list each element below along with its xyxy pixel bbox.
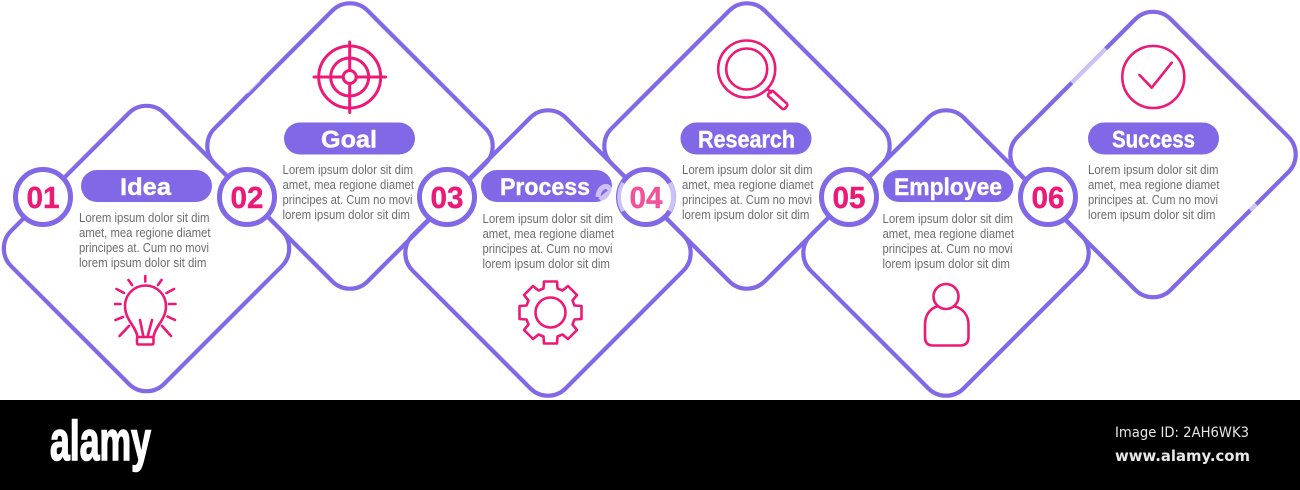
text block: amet, mea regione diamet bbox=[482, 226, 614, 241]
text block: amet, mea regione diamet bbox=[682, 177, 814, 192]
text block: lorem ipsum dolor sit dim bbox=[482, 256, 610, 271]
text block: principes at. Cum no movi bbox=[282, 192, 413, 207]
diamond outline 04 bbox=[594, 0, 900, 299]
text block bbox=[1088, 162, 1220, 222]
text block: principes at. Cum no movi bbox=[882, 241, 1013, 256]
number badge 05 bbox=[822, 170, 876, 224]
number badge 01 bbox=[16, 170, 70, 224]
diamond outline 02 bbox=[197, 0, 503, 299]
text block bbox=[79, 210, 211, 270]
text block bbox=[882, 211, 1014, 271]
website address: www.alamy.com bbox=[1115, 447, 1250, 465]
text block: principes at. Cum no movi bbox=[482, 241, 613, 256]
diamond outline 01 bbox=[0, 95, 300, 402]
text block: Lorem ipsum dolor sit dim bbox=[79, 210, 210, 225]
number badge 01: 01 bbox=[26, 180, 60, 215]
text block: principes at. Cum no movi bbox=[1088, 192, 1218, 207]
text block: amet, mea regione diamet bbox=[282, 177, 414, 192]
icon: magnifying glass bbox=[718, 40, 788, 110]
text block: lorem ipsum dolor sit dim bbox=[882, 256, 1010, 271]
number badge 04: 04 bbox=[630, 180, 663, 215]
diamond outline 03 bbox=[395, 100, 701, 406]
text block: lorem ipsum dolor sit dim bbox=[79, 255, 206, 270]
heading: Idea bbox=[81, 170, 212, 202]
text block: lorem ipsum dolor sit dim bbox=[682, 207, 810, 222]
footer band bbox=[0, 400, 1300, 490]
heading: Employee: Employee bbox=[894, 174, 1002, 201]
panel: process bbox=[395, 100, 701, 406]
diamond outline 05 bbox=[793, 100, 1099, 406]
text block: amet, mea regione diamet bbox=[1088, 177, 1220, 192]
icon: check mark in circle bbox=[1122, 46, 1184, 108]
number badge 03: 03 bbox=[430, 180, 464, 215]
panel: idea bbox=[0, 95, 300, 402]
text block bbox=[282, 162, 414, 222]
icon: light bulb bbox=[115, 276, 176, 344]
text block: principes at. Cum no movi bbox=[682, 192, 812, 207]
logo: alamy: alamy bbox=[50, 409, 151, 472]
watermark traces bbox=[246, 49, 1256, 211]
heading: Goal: Goal bbox=[321, 126, 377, 154]
heading: Idea: Idea bbox=[120, 174, 172, 201]
heading: Success bbox=[1088, 122, 1219, 154]
icon: target bbox=[314, 42, 386, 112]
number badge 06: 06 bbox=[1032, 180, 1064, 215]
icon: person bbox=[925, 284, 968, 346]
heading: Research: Research bbox=[698, 126, 795, 154]
text block: Lorem ipsum dolor sit dim bbox=[482, 211, 613, 226]
heading: Success: Success bbox=[1112, 126, 1195, 154]
heading: Goal bbox=[284, 122, 415, 154]
panel: employee bbox=[793, 100, 1099, 406]
number badge 06 bbox=[1020, 170, 1076, 224]
heading: Process: Process bbox=[500, 174, 590, 201]
number badge 02 bbox=[220, 170, 274, 224]
panel: success bbox=[1000, 1, 1300, 308]
text block bbox=[682, 162, 814, 222]
text block: Lorem ipsum dolor sit dim bbox=[1088, 162, 1218, 177]
text block: amet, mea regione diamet bbox=[882, 226, 1014, 241]
number badge 05: 05 bbox=[832, 180, 866, 215]
number badge 04 bbox=[618, 170, 674, 224]
number badge 03 bbox=[420, 170, 474, 224]
diamond outline 06 bbox=[1000, 1, 1300, 308]
text block: amet, mea regione diamet bbox=[79, 225, 211, 240]
text block: principes at. Cum no movi bbox=[79, 240, 209, 255]
text block: Lorem ipsum dolor sit dim bbox=[682, 162, 812, 177]
heading: Process bbox=[481, 170, 612, 202]
heading: Research bbox=[680, 122, 812, 154]
image id: Image ID: 2AH6WK3 bbox=[1115, 425, 1249, 441]
text block bbox=[482, 211, 614, 271]
text block: lorem ipsum dolor sit dim bbox=[1088, 207, 1216, 222]
number badge 02: 02 bbox=[230, 180, 264, 215]
panel: research bbox=[594, 0, 900, 299]
panel: goal bbox=[197, 0, 503, 299]
text block: lorem ipsum dolor sit dim bbox=[282, 207, 410, 222]
icon: gear bbox=[520, 282, 582, 344]
text block: Lorem ipsum dolor sit dim bbox=[282, 162, 413, 177]
text block: Lorem ipsum dolor sit dim bbox=[882, 211, 1013, 226]
